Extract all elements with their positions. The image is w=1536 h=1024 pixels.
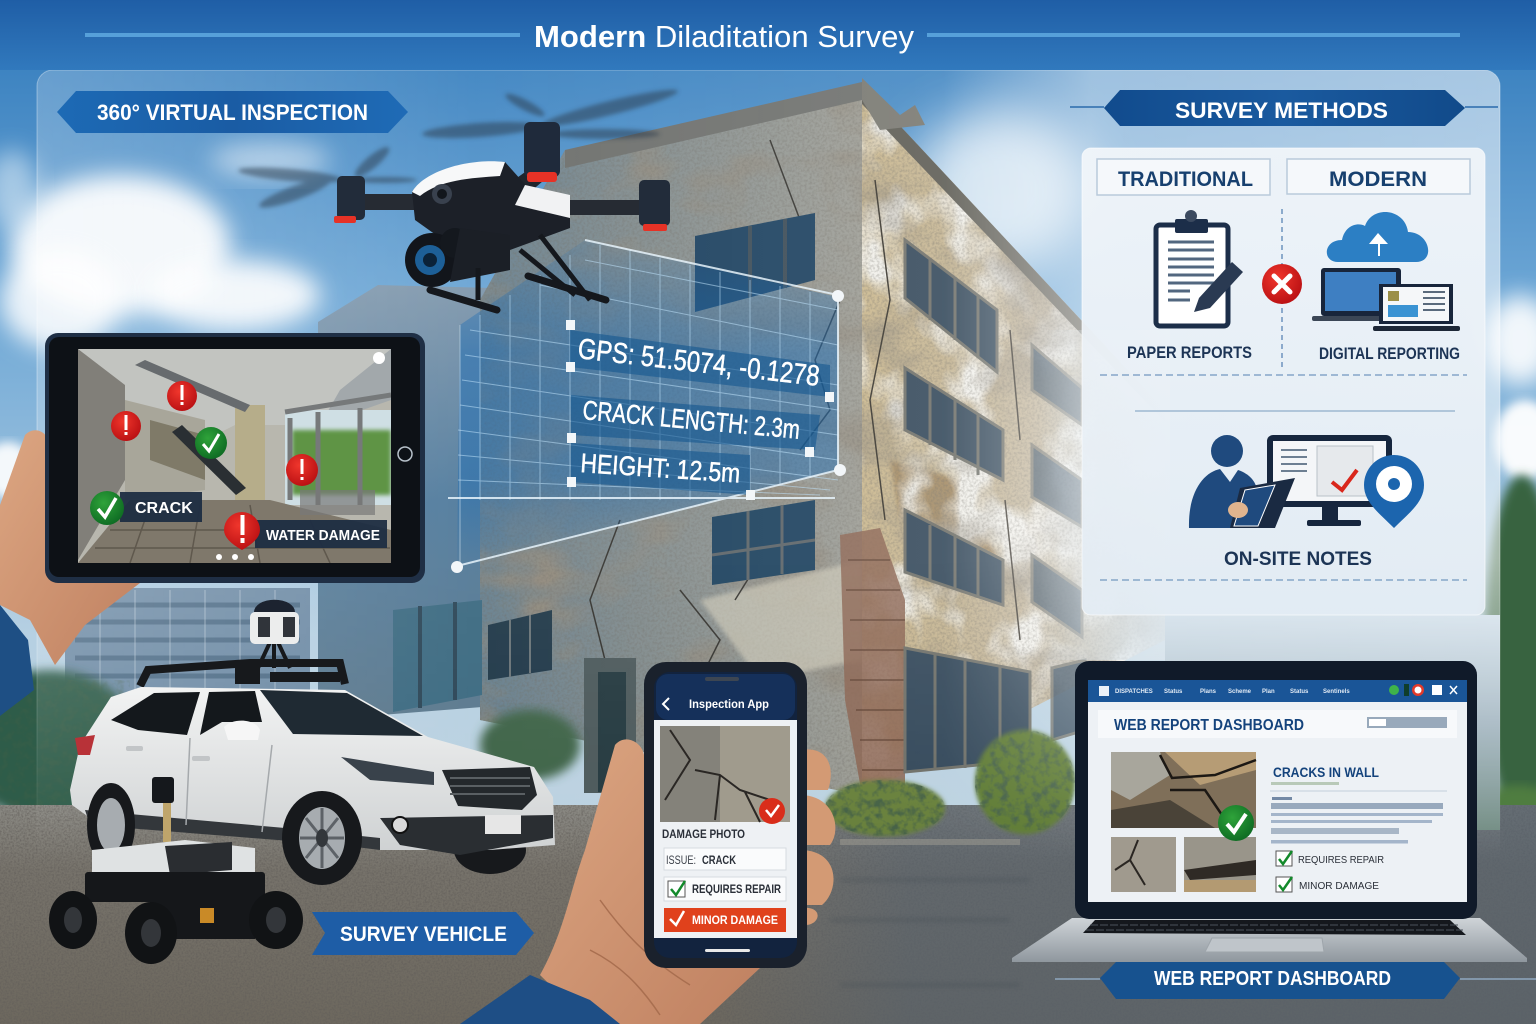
heading: traditional: TRADITIONAL [1118, 168, 1253, 191]
field: issue: ISSUE: [666, 855, 696, 867]
damage photo [660, 726, 790, 824]
dashboard crack details: CRACKS IN WALL [1273, 765, 1379, 780]
title: Modern Diladitation Survey [534, 19, 914, 54]
icon: site inspector with monitor and map pin [1189, 435, 1424, 528]
roof edge [862, 78, 925, 130]
landing gear [478, 235, 590, 300]
building [318, 78, 1170, 795]
bushes at building base [480, 710, 1075, 840]
haze over far end [1040, 330, 1170, 660]
hand holding tablet [0, 430, 140, 716]
dashboard nav bar: Sentinels [1323, 689, 1350, 695]
field: issue: CRACK [702, 855, 737, 867]
AR measurement overlay [448, 240, 846, 573]
label: paper reports: PAPER REPORTS [1127, 344, 1252, 362]
gimbal camera [405, 233, 459, 287]
marker and label: water damage: WATER DAMAGE [266, 527, 380, 544]
ribbon: 360 virtual inspection [57, 91, 408, 133]
reading: height: HEIGHT: 12.5m [580, 448, 741, 489]
dashboard heading: WEB REPORT DASHBOARD [1114, 717, 1304, 734]
dashboard nav bar [1088, 680, 1467, 702]
dashboard nav bar: Status [1164, 689, 1183, 695]
label: on-site notes: ON-SITE NOTES [1224, 549, 1372, 570]
label: digital reporting: DIGITAL REPORTING [1319, 345, 1460, 363]
panel: survey methods [1082, 148, 1485, 615]
ribbon: survey vehicle [312, 912, 534, 955]
dashboard checklist: REQUIRES REPAIR [1298, 854, 1384, 866]
reading: crack length: CRACK LENGTH: 2.3m [581, 395, 801, 445]
handles [451, 290, 846, 573]
map pin [1364, 455, 1424, 528]
wheels [87, 783, 135, 867]
mirror [224, 721, 260, 740]
car body [70, 687, 555, 850]
roof rack and scanner [140, 600, 345, 686]
field: requires repair [664, 877, 786, 901]
dashboard nav bar: Scheme [1228, 689, 1252, 695]
heading: modern [1287, 159, 1470, 194]
dashboard nav bar: Plan [1262, 689, 1275, 695]
exposed brick [840, 528, 905, 795]
ribbon: web report dashboard [1055, 962, 1536, 999]
body [412, 162, 570, 250]
field: minor damage [664, 908, 786, 932]
marker and label: crack: CRACK [135, 500, 193, 517]
hazy pale area behind dashboard [1165, 615, 1500, 830]
ground floor openings [393, 600, 636, 793]
pager dots [216, 352, 385, 560]
dashboard nav bar: DISPATCHES [1115, 689, 1153, 695]
dashboard checklist [1276, 851, 1384, 892]
tablet screen: interior scene [78, 349, 391, 563]
headlight, grille, bumper [341, 757, 434, 785]
heading: traditional [1097, 159, 1270, 195]
app header: Inspection App [689, 697, 769, 711]
door seams and handles [186, 738, 272, 832]
monitor [1267, 435, 1392, 526]
markers: other issues [111, 381, 318, 486]
marker and label: water damage [224, 512, 387, 550]
survey vehicle [70, 600, 555, 885]
trees and bushes [0, 475, 1536, 835]
ground [0, 805, 1536, 1024]
left facade window top [695, 213, 815, 312]
arms [360, 194, 430, 210]
person [1189, 435, 1295, 528]
ribbon: web report dashboard: WEB REPORT DASHBOARD [1154, 968, 1391, 990]
drone [238, 84, 680, 310]
distant glass building [65, 588, 310, 698]
tablet [45, 333, 425, 583]
dashboard checklist: MINOR DAMAGE [1299, 880, 1379, 892]
laptop base [1012, 918, 1527, 962]
main translucent frame [37, 70, 1500, 870]
ground robot [49, 777, 303, 964]
icon: laptop and tablet reports [1312, 268, 1460, 331]
left facade window mid [712, 500, 815, 585]
clouds [0, 110, 1536, 498]
windows [260, 690, 423, 736]
field: minor damage: MINOR DAMAGE [692, 915, 778, 927]
title band [0, 0, 1536, 70]
rear wing [318, 285, 570, 720]
ribbon: survey vehicle: SURVEY VEHICLE [340, 923, 507, 946]
left facade [480, 82, 865, 795]
ribbon: survey methods: SURVEY METHODS [1175, 98, 1388, 123]
icon: versus cross [1262, 264, 1302, 304]
smartphone [644, 662, 807, 968]
app header [656, 674, 795, 720]
dashboard crack details [1270, 765, 1447, 844]
dashboard photos [1111, 752, 1256, 892]
heading: modern: MODERN [1329, 168, 1427, 191]
dashboard heading [1098, 710, 1457, 738]
ribbon: survey methods [1070, 90, 1498, 126]
dashboard nav bar: Status [1290, 689, 1309, 695]
right facade windows [905, 240, 1085, 772]
icon: clipboard and pen [1156, 210, 1243, 326]
dashboard nav bar: Plans [1200, 689, 1217, 695]
propeller blur [238, 84, 680, 213]
field: requires repair: REQUIRES REPAIR [692, 884, 782, 896]
ribbon: 360 virtual inspection: 360° VIRTUAL INSPECTION [97, 100, 368, 125]
field: issue [664, 848, 786, 870]
laptop [1012, 661, 1527, 962]
icon: cloud upload [1327, 212, 1428, 262]
right facade [862, 85, 1165, 795]
right hand holding phone [460, 739, 835, 1024]
damage photo caption: DAMAGE PHOTO [662, 827, 745, 841]
far front wheel [454, 826, 526, 874]
marker and label: crack [90, 491, 202, 525]
reading: GPS: GPS: 51.5074, -0.1278 [576, 333, 821, 393]
motors [337, 176, 365, 220]
